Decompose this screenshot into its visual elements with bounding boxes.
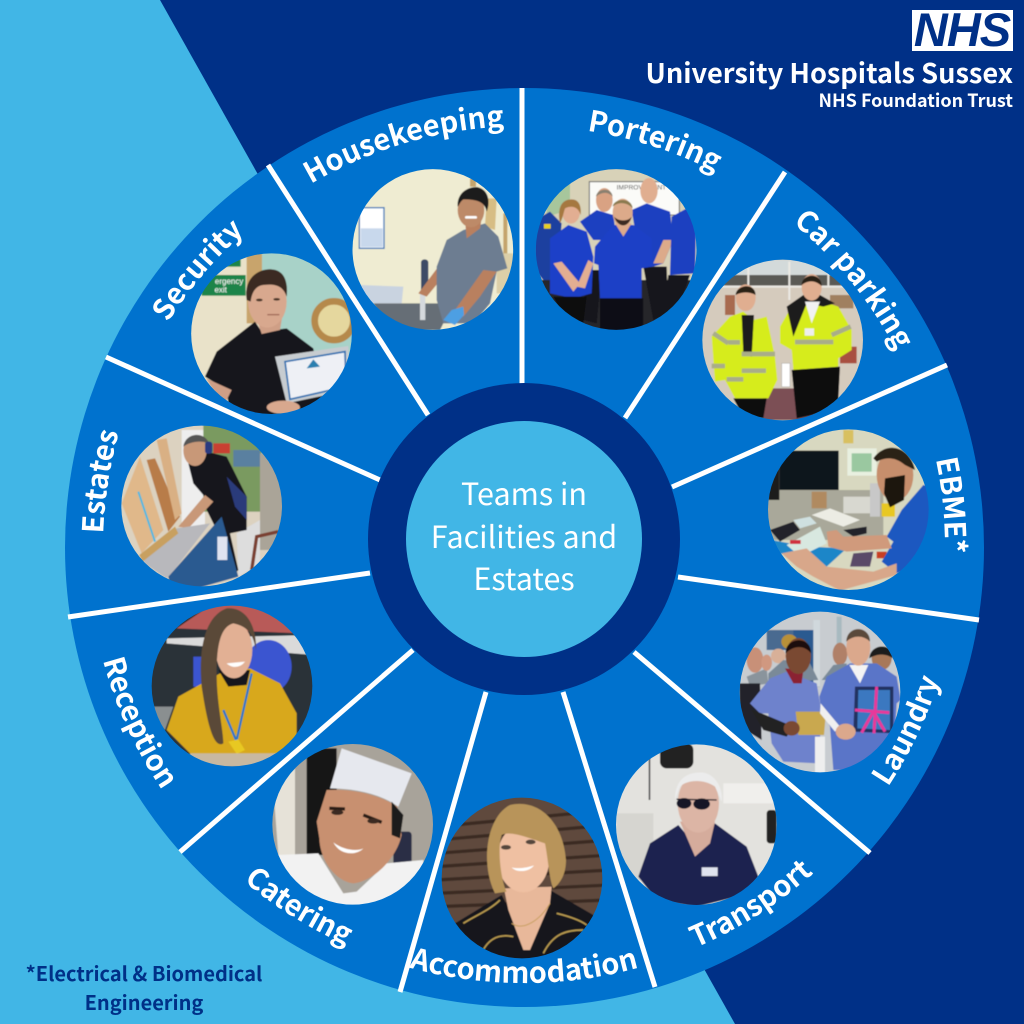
photo: housekeeping <box>352 169 514 330</box>
photo: catering <box>270 742 437 908</box>
photo: car parking <box>702 260 863 420</box>
wheel spokes <box>68 88 979 992</box>
NHS logo: NHS <box>914 3 1011 56</box>
label: Housekeeping: Housekeeping <box>302 106 504 183</box>
label: Accommodation: Accommodation <box>410 948 637 984</box>
label: Transport: Transport <box>688 860 813 945</box>
label: Catering: Catering <box>248 868 352 949</box>
photo: reception <box>150 602 317 770</box>
photo: security <box>191 253 352 414</box>
photo: estates <box>121 426 282 586</box>
photo: laundry <box>737 610 903 777</box>
footnote: *Electrical & Biomedical <box>26 958 262 987</box>
photo: accommodation <box>442 798 602 958</box>
label: Reception: Reception <box>104 656 174 788</box>
photo: transport <box>616 744 777 905</box>
photo: EBME <box>763 427 933 593</box>
centre title: Facilities and <box>431 513 617 557</box>
centre title <box>431 470 617 599</box>
photo: security: exit <box>214 286 228 295</box>
label: Car parking: Car parking <box>798 211 910 352</box>
label: Portering: Portering <box>590 110 722 176</box>
footnote <box>26 958 262 1016</box>
background: light blue diagonal <box>0 0 735 1024</box>
label: Estates: Estates <box>82 430 118 531</box>
photo: portering: IMPROVEMENT <box>617 184 666 191</box>
centre title: Estates <box>473 555 575 599</box>
photo: security: ergency <box>215 277 243 286</box>
centre ring <box>368 383 680 695</box>
label: Security: Security <box>153 220 242 320</box>
label: EBME: EBME* <box>936 458 968 552</box>
organisation name: University Hospitals Sussex <box>646 51 1013 91</box>
centre title: Teams in <box>461 470 587 514</box>
centre circle <box>406 421 642 657</box>
label: Laundry: Laundry <box>871 674 942 785</box>
photo: portering <box>533 167 700 333</box>
organisation subtitle: NHS Foundation Trust <box>819 87 1013 113</box>
footnote: Engineering <box>85 987 203 1016</box>
